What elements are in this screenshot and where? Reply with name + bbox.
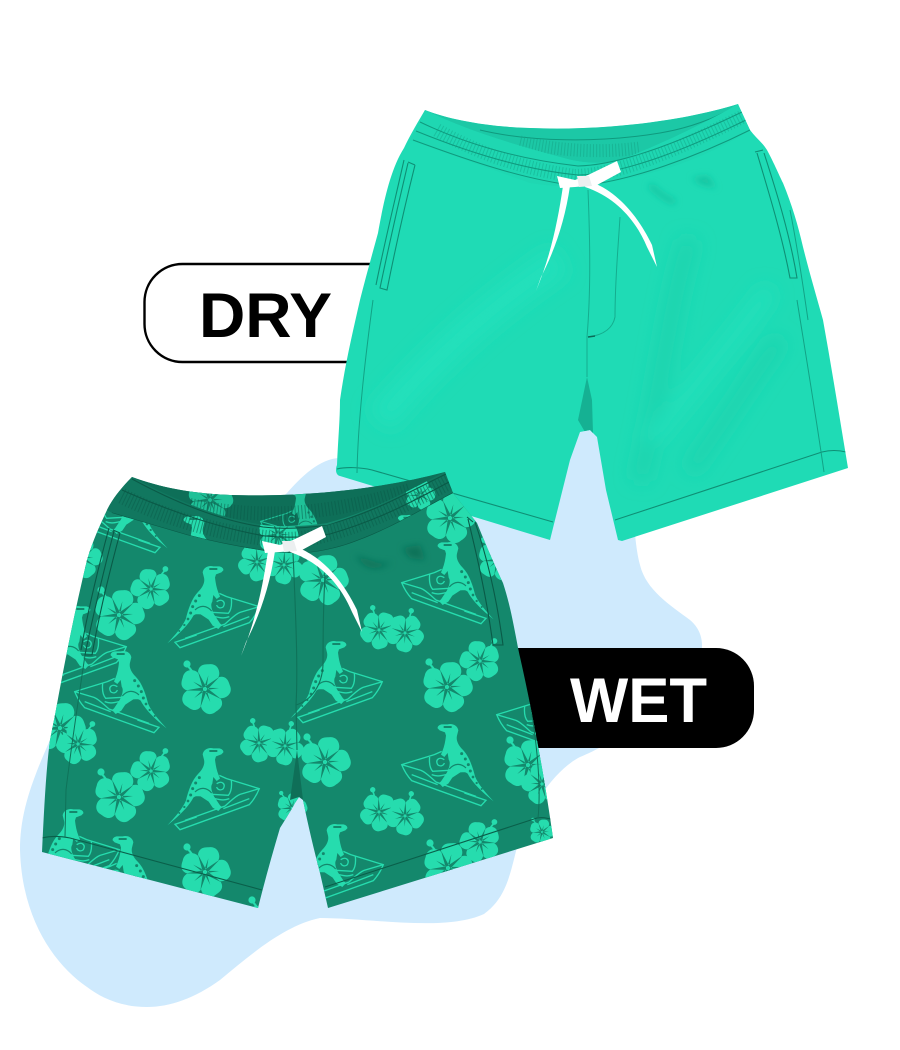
label: WET bbox=[440, 648, 754, 748]
right pocket bbox=[467, 517, 503, 645]
drawstring bbox=[536, 161, 657, 291]
back of waistband bbox=[425, 104, 738, 163]
wet shorts pattern bbox=[48, 493, 553, 908]
background blob bbox=[20, 420, 702, 1007]
left pocket bbox=[376, 160, 415, 290]
waistband front bbox=[107, 472, 453, 553]
hibiscus flowers bbox=[48, 493, 553, 908]
right pocket bbox=[755, 150, 797, 278]
text: DRY: DRY bbox=[199, 281, 332, 351]
fly and seams bbox=[293, 553, 325, 750]
drawstring bbox=[241, 526, 362, 656]
waist fold shadows bbox=[355, 545, 425, 568]
wet shorts body bbox=[42, 472, 553, 908]
pill: WET bbox=[440, 648, 754, 748]
dry shorts body bbox=[336, 104, 848, 541]
soft fabric folds bbox=[380, 240, 780, 480]
label: DRY bbox=[144, 264, 434, 362]
infographic canvas bbox=[20, 104, 848, 1007]
front waistband bbox=[424, 104, 750, 156]
pill outline: DRY bbox=[144, 264, 434, 362]
wet shorts bbox=[42, 472, 553, 908]
t-rex on jet ski motifs bbox=[48, 514, 538, 898]
waistband back bbox=[132, 472, 444, 526]
text: WET: WET bbox=[570, 666, 707, 736]
dry shorts bbox=[336, 104, 848, 541]
left pocket bbox=[81, 528, 120, 655]
fly and seams bbox=[587, 190, 620, 377]
